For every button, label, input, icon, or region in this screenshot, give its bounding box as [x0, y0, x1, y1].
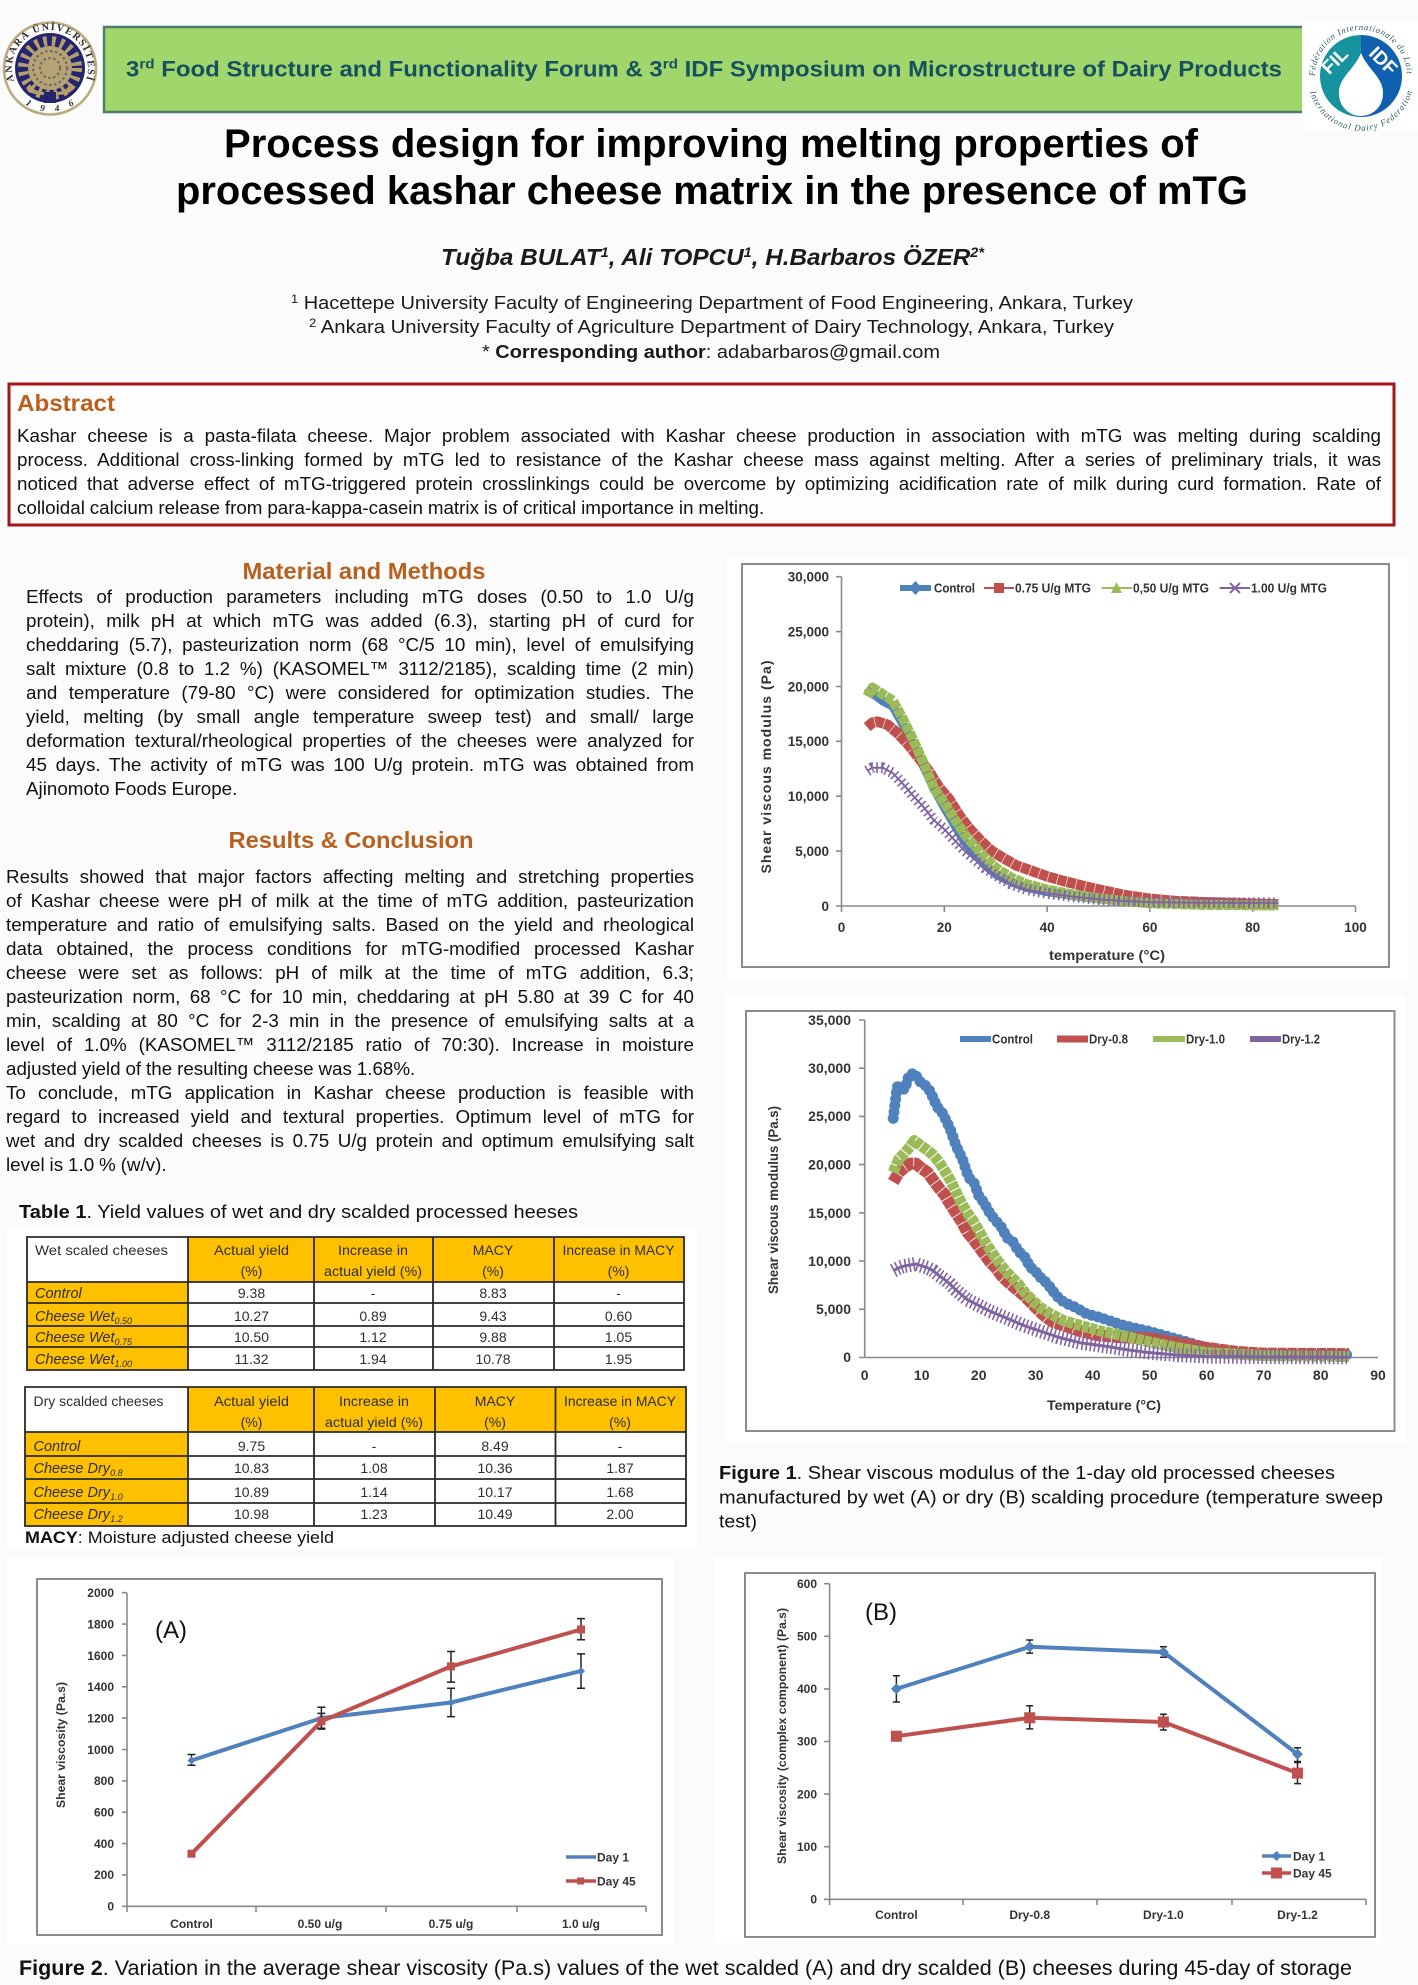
authors: , H.Barbaros ÖZER	[751, 244, 970, 270]
table: wet scalded cheeses: Increase in	[338, 1242, 408, 1258]
table: dry scalded cheeses: -	[618, 1438, 623, 1454]
logo: International Dairy Federation	[1309, 26, 1412, 132]
banner text: IDF Symposium on Microstructure of Dairy Products	[678, 56, 1282, 82]
legend: Control	[992, 1032, 1033, 1046]
material and methods text: 45 days. The activity of mTG was 100 U/g protein. mTG was obtained from	[26, 754, 694, 775]
material and methods text: and temperature (79-80 °C) were considered for optimization studies. The	[26, 682, 694, 703]
material and methods text: Ajinomoto Foods Europe.	[26, 778, 237, 799]
figure 1 caption	[719, 1462, 1383, 1532]
table: wet scalded cheeses: 10.50	[234, 1329, 269, 1345]
results and conclusion text: level is 1.0 % (w/v).	[6, 1154, 167, 1175]
affiliations: 1	[291, 292, 299, 306]
axes	[859, 1020, 1378, 1358]
legend: Dry-1.0	[1186, 1032, 1225, 1046]
y tick labels: 2000	[87, 1586, 114, 1600]
table: wet scalded cheeses: 1.05	[605, 1329, 632, 1345]
abstract text: Kashar cheese is a pasta-filata cheese. Major problem associated with Kashar cheese production in association with mTG was melting during scalding	[17, 425, 1381, 446]
x tick labels: 70	[1256, 1367, 1272, 1383]
panel: abstract	[9, 384, 1394, 525]
table: wet scalded cheeses: (%)	[608, 1263, 629, 1279]
y tick labels: 300	[797, 1734, 817, 1748]
table: wet scalded cheeses: 0.75	[115, 1337, 133, 1347]
y tick labels: 200	[797, 1788, 817, 1802]
y tick labels: 1400	[87, 1680, 114, 1694]
logo: International Dairy Federation: IDF	[1364, 43, 1401, 80]
banner text: rd	[139, 56, 155, 72]
table: dry scalded cheeses: 0.8	[110, 1468, 123, 1478]
y tick labels: 25,000	[808, 1108, 851, 1124]
table: wet scalded cheeses: 1.94	[359, 1351, 387, 1367]
table: dry scalded cheeses: Cheese Dry	[34, 1461, 110, 1477]
logo: International Dairy Federation: International Dairy Federation	[1310, 91, 1412, 132]
y tick labels: 0	[821, 899, 829, 914]
results and conclusion text: temperature and ratio of emulsifying salts. Based on the yield and rheological	[6, 914, 694, 935]
x tick labels: 90	[1370, 1367, 1386, 1383]
results and conclusion text: adjusted yield of the resulting cheese was 1.68%.	[6, 1058, 415, 1079]
y tick labels	[797, 1577, 817, 1906]
y tick labels: 200	[94, 1868, 114, 1882]
y axis title: Shear viscous modulus (Pa)	[758, 660, 774, 874]
y tick labels: 400	[94, 1837, 114, 1851]
title	[176, 122, 1248, 213]
table: wet scalded cheeses: MACY	[473, 1242, 514, 1258]
x tick labels: 20	[971, 1367, 987, 1383]
x tick labels: 10	[914, 1367, 930, 1383]
x tick labels: 30	[1028, 1367, 1044, 1383]
series: day 45	[188, 1619, 585, 1858]
table caption: Table 1 . Yield values of wet and dry scalded processed heeses	[19, 1201, 578, 1222]
authors: Tuğba BULAT	[441, 244, 595, 270]
title: processed kashar cheese matrix in the presence of mTG	[176, 169, 1248, 213]
y axis title: Shear viscosity (complex component) (Pa.s)	[775, 1608, 789, 1864]
table: wet scalded cheeses: 0.50	[115, 1316, 132, 1326]
panel: yield tables	[7, 1227, 697, 1549]
x tick labels: 40	[1085, 1367, 1101, 1383]
chart: figure 2B shear viscosity dry scalded	[714, 1558, 1382, 1943]
x tick labels: 0	[861, 1367, 869, 1383]
y tick labels: 30,000	[808, 1060, 851, 1076]
x tick labels: Dry-1.0	[1143, 1908, 1184, 1922]
legend: Control	[934, 582, 975, 596]
y tick labels: 15,000	[808, 1205, 851, 1221]
table: wet scalded cheeses	[27, 1237, 684, 1370]
authors: 1	[744, 244, 752, 260]
axes	[824, 1584, 1366, 1905]
table: dry scalded cheeses: Cheese Dry	[34, 1507, 110, 1523]
legend: Day 45	[597, 1874, 636, 1888]
legend: 0,50 U/g MTG	[1133, 582, 1209, 596]
y tick labels: 5,000	[816, 1301, 851, 1317]
x tick labels: 1.0 u/g	[562, 1917, 600, 1931]
table: dry scalded cheeses: 10.98	[234, 1506, 269, 1522]
y tick labels: 800	[94, 1774, 114, 1788]
y tick labels: 30,000	[788, 570, 829, 584]
table: dry scalded cheeses	[25, 1387, 686, 1526]
axes	[122, 1593, 646, 1912]
y tick labels: 600	[94, 1806, 114, 1820]
y tick labels: 500	[797, 1630, 817, 1644]
chart: figure 1B shear viscous modulus dry scalded	[725, 995, 1405, 1443]
results and conclusion text: pasteurization norm, 68 °C for 10 min, cheddaring at pH 5.80 at 39 C for 40	[6, 986, 694, 1007]
table: wet scalded cheeses: 0.89	[359, 1308, 387, 1324]
x axis title: Temperature (°C)	[1047, 1397, 1161, 1413]
abstract text: process. Additional cross-linking formed by mTG led to resistance of the Kashar cheese mass against melting. After a series of preliminary trials, it was	[17, 449, 1381, 470]
table: wet scalded cheeses: 1.00	[115, 1359, 132, 1369]
y tick labels: 1800	[87, 1618, 114, 1632]
table: wet scalded cheeses: Cheese Wet	[35, 1330, 115, 1346]
legend: Dry-0.8	[1089, 1032, 1128, 1046]
table: dry scalded cheeses: 1.08	[360, 1460, 388, 1476]
y tick labels: 600	[797, 1577, 817, 1591]
x tick labels: 0	[838, 920, 845, 935]
table: wet scalded cheeses: Control	[35, 1286, 83, 1302]
table: wet scalded cheeses: Actual yield	[214, 1242, 289, 1258]
x tick labels	[875, 1908, 1318, 1922]
legend: Day 1	[1293, 1850, 1325, 1864]
axes	[836, 577, 1356, 912]
table: dry scalded cheeses: Increase in	[339, 1393, 409, 1409]
legend	[900, 581, 1327, 596]
results and conclusion text	[6, 866, 694, 1175]
x tick labels: 40	[1040, 920, 1055, 935]
y tick labels: 100	[797, 1840, 817, 1854]
x tick labels: 100	[1344, 920, 1367, 935]
x tick labels: Control	[170, 1917, 213, 1931]
table: dry scalded cheeses: 10.36	[477, 1460, 513, 1476]
y tick labels: 20,000	[788, 680, 829, 694]
table note: MACY : Moisture adjusted cheese yield	[25, 1529, 334, 1547]
table: wet scalded cheeses: 9.38	[238, 1285, 265, 1301]
chart: figure 2A shear viscosity wet scalded	[7, 1557, 674, 1945]
legend	[960, 1032, 1320, 1046]
table: dry scalded cheeses: (%)	[484, 1414, 506, 1430]
material and methods text	[26, 586, 694, 799]
table: dry scalded cheeses: 10.89	[234, 1484, 269, 1500]
series: day 1	[188, 1654, 585, 1765]
y tick labels: 15,000	[788, 734, 829, 749]
table: dry scalded cheeses: 1.14	[360, 1484, 388, 1500]
heading: material and methods: Material and Methods	[242, 558, 486, 584]
table: dry scalded cheeses: 1.2	[110, 1514, 123, 1524]
x tick labels: 20	[937, 920, 952, 935]
affiliations: * Corresponding author : adabarbaros@gmail.com	[482, 341, 940, 362]
table: wet scalded cheeses: 8.83	[479, 1285, 507, 1301]
table: wet scalded cheeses: -	[371, 1285, 376, 1301]
results and conclusion text: level of 1.0% (KASOMEL™ 3112/2185 ratio of 70:30). Increase in moisture	[6, 1034, 694, 1055]
y tick labels: 0	[107, 1900, 114, 1914]
table: wet scalded cheeses: 9.43	[479, 1308, 507, 1324]
material and methods text: protein), milk pH at which mTG was added (6.3), starting pH of curd for	[26, 610, 694, 631]
table: wet scalded cheeses: 11.32	[234, 1351, 269, 1367]
y tick labels: 1200	[87, 1712, 114, 1726]
legend: Day 1	[597, 1850, 629, 1864]
y tick labels: 1000	[87, 1743, 114, 1757]
abstract text: colloidal calcium release from para-kappa-casein matrix is of critical importance in melting.	[17, 497, 764, 518]
y tick labels	[808, 1012, 851, 1365]
y tick labels	[87, 1586, 114, 1914]
legend: Day 45	[1293, 1866, 1332, 1880]
results and conclusion text: of Kashar cheese were pH of milk at the time of mTG addition, pasteurization	[6, 890, 694, 911]
table: dry scalded cheeses: 10.17	[477, 1484, 513, 1500]
legend: 1.00 U/g MTG	[1251, 582, 1327, 596]
series	[893, 1073, 1349, 1357]
table: dry scalded cheeses: Increase in MACY	[564, 1393, 677, 1409]
heading: results and conclusion: Results & Conclusion	[228, 827, 474, 853]
material and methods text: salt mixture (0.8 to 1.2 %) (KASOMEL™ 3112/2185), scalding time (2 min)	[26, 658, 694, 679]
x tick labels: 80	[1313, 1367, 1329, 1383]
results and conclusion text: Results showed that major factors affecting melting and stretching properties	[6, 866, 694, 887]
table: dry scalded cheeses: Dry scalded cheeses	[34, 1393, 164, 1409]
results and conclusion text: wet and dry scalded cheeses is 0.75 U/g protein and optimum emulsifying salt	[6, 1130, 694, 1151]
material and methods text: cheddaring (5.7), pasteurization norm (68 °C/5 10 min), level of emulsifying	[26, 634, 694, 655]
table: wet scalded cheeses: -	[616, 1285, 621, 1301]
y tick labels: 20,000	[808, 1156, 851, 1172]
table: wet scalded cheeses: 10.78	[475, 1351, 511, 1367]
table: wet scalded cheeses: Cheese Wet	[35, 1352, 115, 1368]
table: wet scalded cheeses: 1.95	[605, 1351, 632, 1367]
abstract heading: Abstract	[17, 390, 115, 416]
banner text: Food Structure and Functionality Forum & 3	[155, 56, 663, 82]
table: dry scalded cheeses: (%)	[241, 1414, 262, 1430]
y tick labels: 10,000	[788, 789, 829, 804]
logo: Ankara University: 1 9 4 6	[25, 99, 74, 112]
authors: 2*	[969, 244, 985, 260]
table: wet scalded cheeses: 0.60	[605, 1308, 632, 1324]
table: dry scalded cheeses: Control	[34, 1439, 81, 1455]
affiliations: 2	[309, 316, 317, 330]
logo: International Dairy Federation: Fédération Internationale du Lait	[1309, 26, 1412, 76]
series: day 45	[891, 1706, 1303, 1784]
logo: International Dairy Federation: FIL	[1318, 44, 1353, 79]
table: dry scalded cheeses: Cheese Dry	[34, 1485, 110, 1501]
authors: , Ali TOPCU	[608, 244, 745, 270]
x tick labels: 60	[1199, 1367, 1215, 1383]
table: wet scalded cheeses: 9.88	[479, 1329, 507, 1345]
banner	[104, 27, 1302, 112]
panel letter A: (A)	[155, 1617, 187, 1644]
x tick labels: Control	[875, 1908, 918, 1922]
x tick labels	[170, 1917, 600, 1931]
banner text: 3	[126, 56, 138, 82]
legend	[1262, 1850, 1332, 1880]
x tick labels	[838, 920, 1367, 935]
y tick labels: 400	[797, 1682, 817, 1696]
x tick labels: Dry-0.8	[1009, 1908, 1050, 1922]
table: dry scalded cheeses: Actual yield	[214, 1393, 289, 1409]
x tick labels: 0.50 u/g	[298, 1917, 342, 1931]
affiliations	[291, 292, 1134, 362]
series	[867, 688, 1278, 905]
x tick labels: 80	[1245, 920, 1260, 935]
authors: 1	[601, 244, 609, 260]
table: dry scalded cheeses: 9.75	[238, 1438, 265, 1454]
x tick labels: 0.75 u/g	[429, 1917, 473, 1931]
figure 1 caption: test)	[719, 1510, 757, 1532]
table: dry scalded cheeses: 1.68	[606, 1484, 634, 1500]
panel letter B: (B)	[865, 1599, 897, 1626]
y tick labels: 25,000	[788, 624, 829, 640]
logo: Ankara University: ANKARA ÜNİVERSİTESİ	[5, 22, 96, 82]
table: dry scalded cheeses: 10.83	[234, 1460, 269, 1476]
table: dry scalded cheeses: 8.49	[481, 1438, 509, 1454]
table: dry scalded cheeses: MACY	[475, 1393, 516, 1409]
banner text: rd	[663, 56, 678, 72]
table: dry scalded cheeses: 1.23	[360, 1506, 388, 1522]
results and conclusion text: To conclude, mTG application in Kashar cheese production is feasible with	[6, 1082, 694, 1103]
affiliations: Hacettepe University Faculty of Engineering Department of Food Engineering, Ankara, Turkey	[298, 292, 1134, 313]
table: dry scalded cheeses: actual yield (%)	[325, 1414, 423, 1430]
material and methods text: deformation textural/rheological properties of the cheeses were analyzed for	[26, 730, 694, 751]
figure 1 caption: Figure 1 . Shear viscous modulus of the 1-day old processed cheeses	[719, 1462, 1335, 1483]
x tick labels: 50	[1142, 1367, 1158, 1383]
table: wet scalded cheeses: Wet scaled cheeses	[35, 1242, 168, 1258]
table: wet scalded cheeses: (%)	[482, 1263, 504, 1279]
table: wet scalded cheeses: 1.12	[359, 1329, 387, 1345]
logo: Ankara University	[2, 21, 98, 116]
material and methods text: yield, melting (by small angle temperature sweep test) and small/ large	[26, 706, 694, 727]
x tick labels: Dry-1.2	[1277, 1908, 1318, 1922]
table: dry scalded cheeses: 1.87	[606, 1460, 634, 1476]
y tick labels	[788, 570, 829, 914]
figure 1 caption: manufactured by wet (A) or dry (B) scalding procedure (temperature sweep	[719, 1486, 1383, 1508]
material and methods text: Effects of production parameters including mTG doses (0.50 to 1.0 U/g	[26, 586, 694, 607]
table: wet scalded cheeses: 10.27	[234, 1308, 269, 1324]
results and conclusion text: data obtained, the process conditions for mTG-modified processed Kashar	[6, 938, 694, 959]
legend: 0.75 U/g MTG	[1015, 582, 1091, 596]
x axis title: temperature (°C)	[1049, 947, 1165, 963]
results and conclusion text: regard to increased yield and textural properties. Optimum level of mTG for	[6, 1106, 694, 1127]
x tick labels	[861, 1367, 1386, 1383]
x tick labels: 60	[1142, 920, 1157, 935]
abstract text	[17, 425, 1381, 518]
series: day 1	[891, 1640, 1303, 1762]
figure 2 caption: Figure 2. Variation in the average shear viscosity (Pa.s) values of the wet scalded (A) and dry scalded (B) cheeses during 45-day of storage	[19, 1956, 1352, 1980]
chart: figure 1A shear viscous modulus wet scalded	[727, 557, 1408, 982]
table: dry scalded cheeses: 1.0	[110, 1492, 123, 1502]
legend: Dry-1.2	[1282, 1032, 1320, 1046]
y axis title: Shear viscous modulus (Pa.s)	[765, 1106, 781, 1294]
abstract text: noticed that adverse effect of mTG-triggered protein crosslinkings could be overcome by optimizing acidification rate of milk during curd formation. Rate of	[17, 473, 1381, 494]
legend	[566, 1850, 636, 1888]
table: wet scalded cheeses: Increase in MACY	[562, 1242, 675, 1258]
results and conclusion text: min, scalding at 80 °C for 2-3 min in the presence of emulsifying salts at a	[6, 1010, 694, 1031]
table: wet scalded cheeses: actual yield (%)	[324, 1263, 422, 1279]
affiliations: Ankara University Faculty of Agriculture Department of Dairy Technology, Ankara, Turkey	[316, 316, 1115, 337]
y axis title: Shear viscosity (Pa.s)	[54, 1682, 68, 1808]
y tick labels: 10,000	[808, 1253, 851, 1269]
y tick labels: 0	[843, 1349, 851, 1365]
y tick labels: 5,000	[795, 844, 829, 859]
y tick labels: 1600	[87, 1649, 114, 1663]
title: Process design for improving melting properties of	[224, 122, 1199, 166]
table: dry scalded cheeses: -	[372, 1438, 377, 1454]
table: dry scalded cheeses: 2.00	[606, 1506, 634, 1522]
table: dry scalded cheeses: (%)	[609, 1414, 631, 1430]
table: dry scalded cheeses: 10.49	[477, 1506, 513, 1522]
y tick labels: 35,000	[808, 1012, 851, 1028]
table: wet scalded cheeses: Cheese Wet	[35, 1309, 115, 1325]
results and conclusion text: cheese were set as follows: pH of milk at the time of mTG addition, 6.3;	[6, 962, 694, 983]
y tick labels: 0	[810, 1892, 817, 1906]
table: wet scalded cheeses: (%)	[241, 1263, 262, 1279]
